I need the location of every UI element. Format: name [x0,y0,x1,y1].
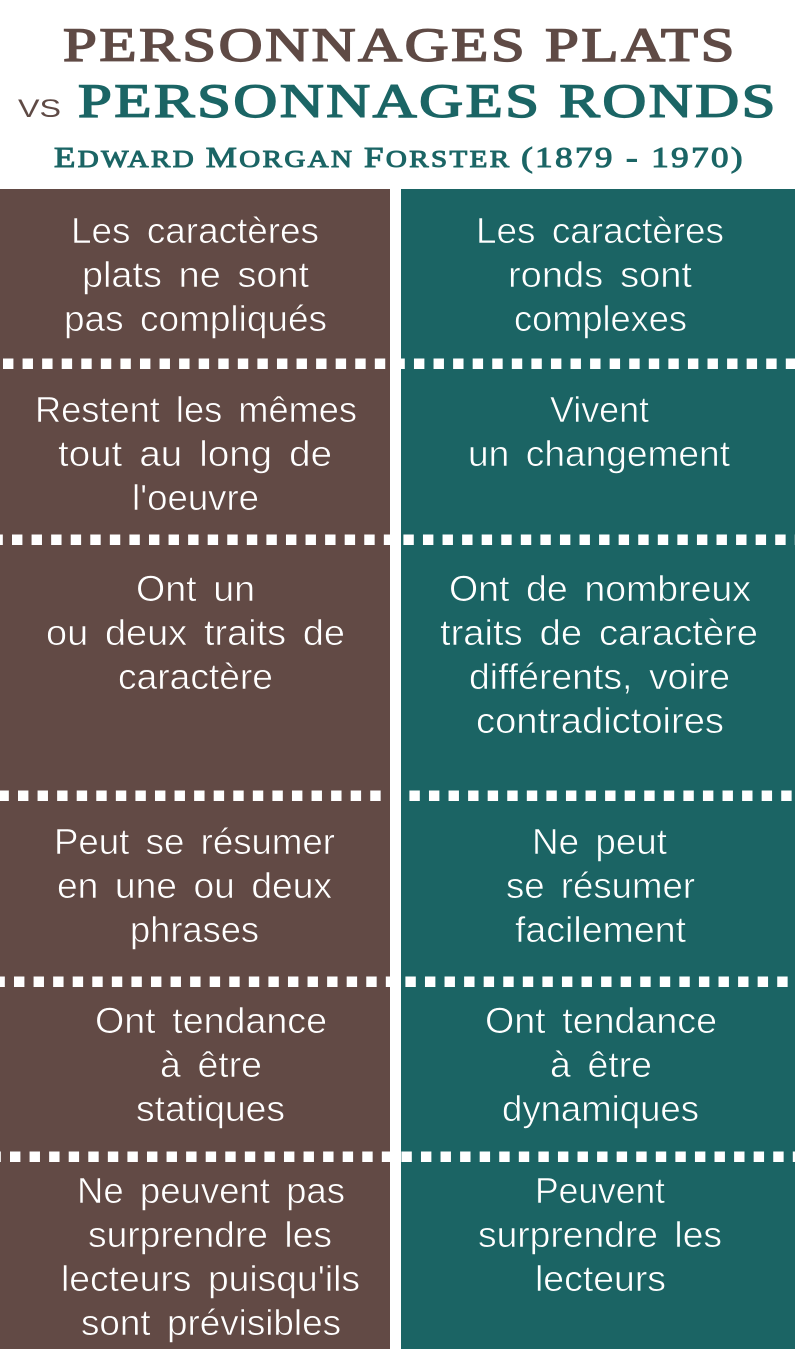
text: row 1 left: plats ne sont [82,254,309,295]
text: row 3 right: contradictoires [476,700,724,741]
text: row 6 left: surprendre les [88,1214,332,1255]
dotted separators [0,364,795,1157]
text: row 5 left: à être [160,1044,262,1085]
panel: personnages ronds [401,189,795,1349]
text: row 1 left: pas compliqués [64,298,327,339]
text: row 3 left: Ont un [136,568,255,609]
text: row 3 left: ou deux traits de [46,612,345,653]
text: row 3 right: différents, voire [469,656,730,697]
text: row 1 right [476,210,724,339]
text: row 2 left: tout au long de [58,433,332,474]
label: vs: VS [18,95,61,123]
text: row 3 right: Ont de nombreux [449,568,751,609]
text: row 6 right: Peuvent [535,1170,665,1211]
right column text [440,210,758,1299]
text: row 1 left [64,210,327,339]
text: row 4 left: en une ou deux [57,865,332,906]
text: row 4 right: facilement [515,909,686,950]
text: row 4 right: se résumer [506,865,695,906]
text: row 2 right [468,389,730,474]
text: row 5 left: Ont tendance [95,1000,327,1041]
text: row 2 left: l'oeuvre [132,477,259,518]
text: row 1 right: Les caractères [476,210,724,251]
text: row 4 left: Peut se résumer [54,821,335,862]
text: row 4 left [54,821,335,950]
text: row 3 left: caractère [118,656,273,697]
text: row 5 left: statiques [136,1088,285,1129]
text: row 2 left [35,389,357,518]
text: row 5 left [95,1000,327,1129]
text: row 2 left: Restent les mêmes [35,389,357,430]
text: row 1 right: ronds sont [508,254,692,295]
text: row 6 left: sont prévisibles [81,1302,341,1343]
title [18,19,778,174]
text: row 6 right: surprendre les [478,1214,722,1255]
heading: personnages ronds: PERSONNAGES RONDS [78,75,778,128]
text: row 3 right [440,568,758,741]
text: row 5 right [485,1000,717,1129]
text: row 1 right: complexes [514,298,687,339]
left column text [35,210,360,1343]
text: row 3 left [46,568,345,697]
text: row 6 left [61,1170,360,1343]
text: row 4 right: Ne peut [532,821,667,862]
text: row 2 right: Vivent [550,389,649,430]
text: row 3 right: traits de caractère [440,612,758,653]
text: row 5 right: à être [550,1044,652,1085]
panel: personnages plats [0,189,390,1349]
text: row 4 right [506,821,695,950]
text: row 1 left: Les caractères [71,210,319,251]
text: row 6 left: Ne peuvent pas [77,1170,345,1211]
heading: personnages plats: PERSONNAGES PLATS [63,19,737,72]
text: row 6 right: lecteurs [535,1258,666,1299]
text: row 6 right [478,1170,722,1299]
text: row 5 right: dynamiques [502,1088,699,1129]
text: row 2 right: un changement [468,433,730,474]
text: row 5 right: Ont tendance [485,1000,717,1041]
text: row 4 left: phrases [130,909,259,950]
subtitle: EDWARD MORGAN FORSTER (1879 - 1970) [54,142,745,174]
text: row 6 left: lecteurs puisqu'ils [61,1258,360,1299]
